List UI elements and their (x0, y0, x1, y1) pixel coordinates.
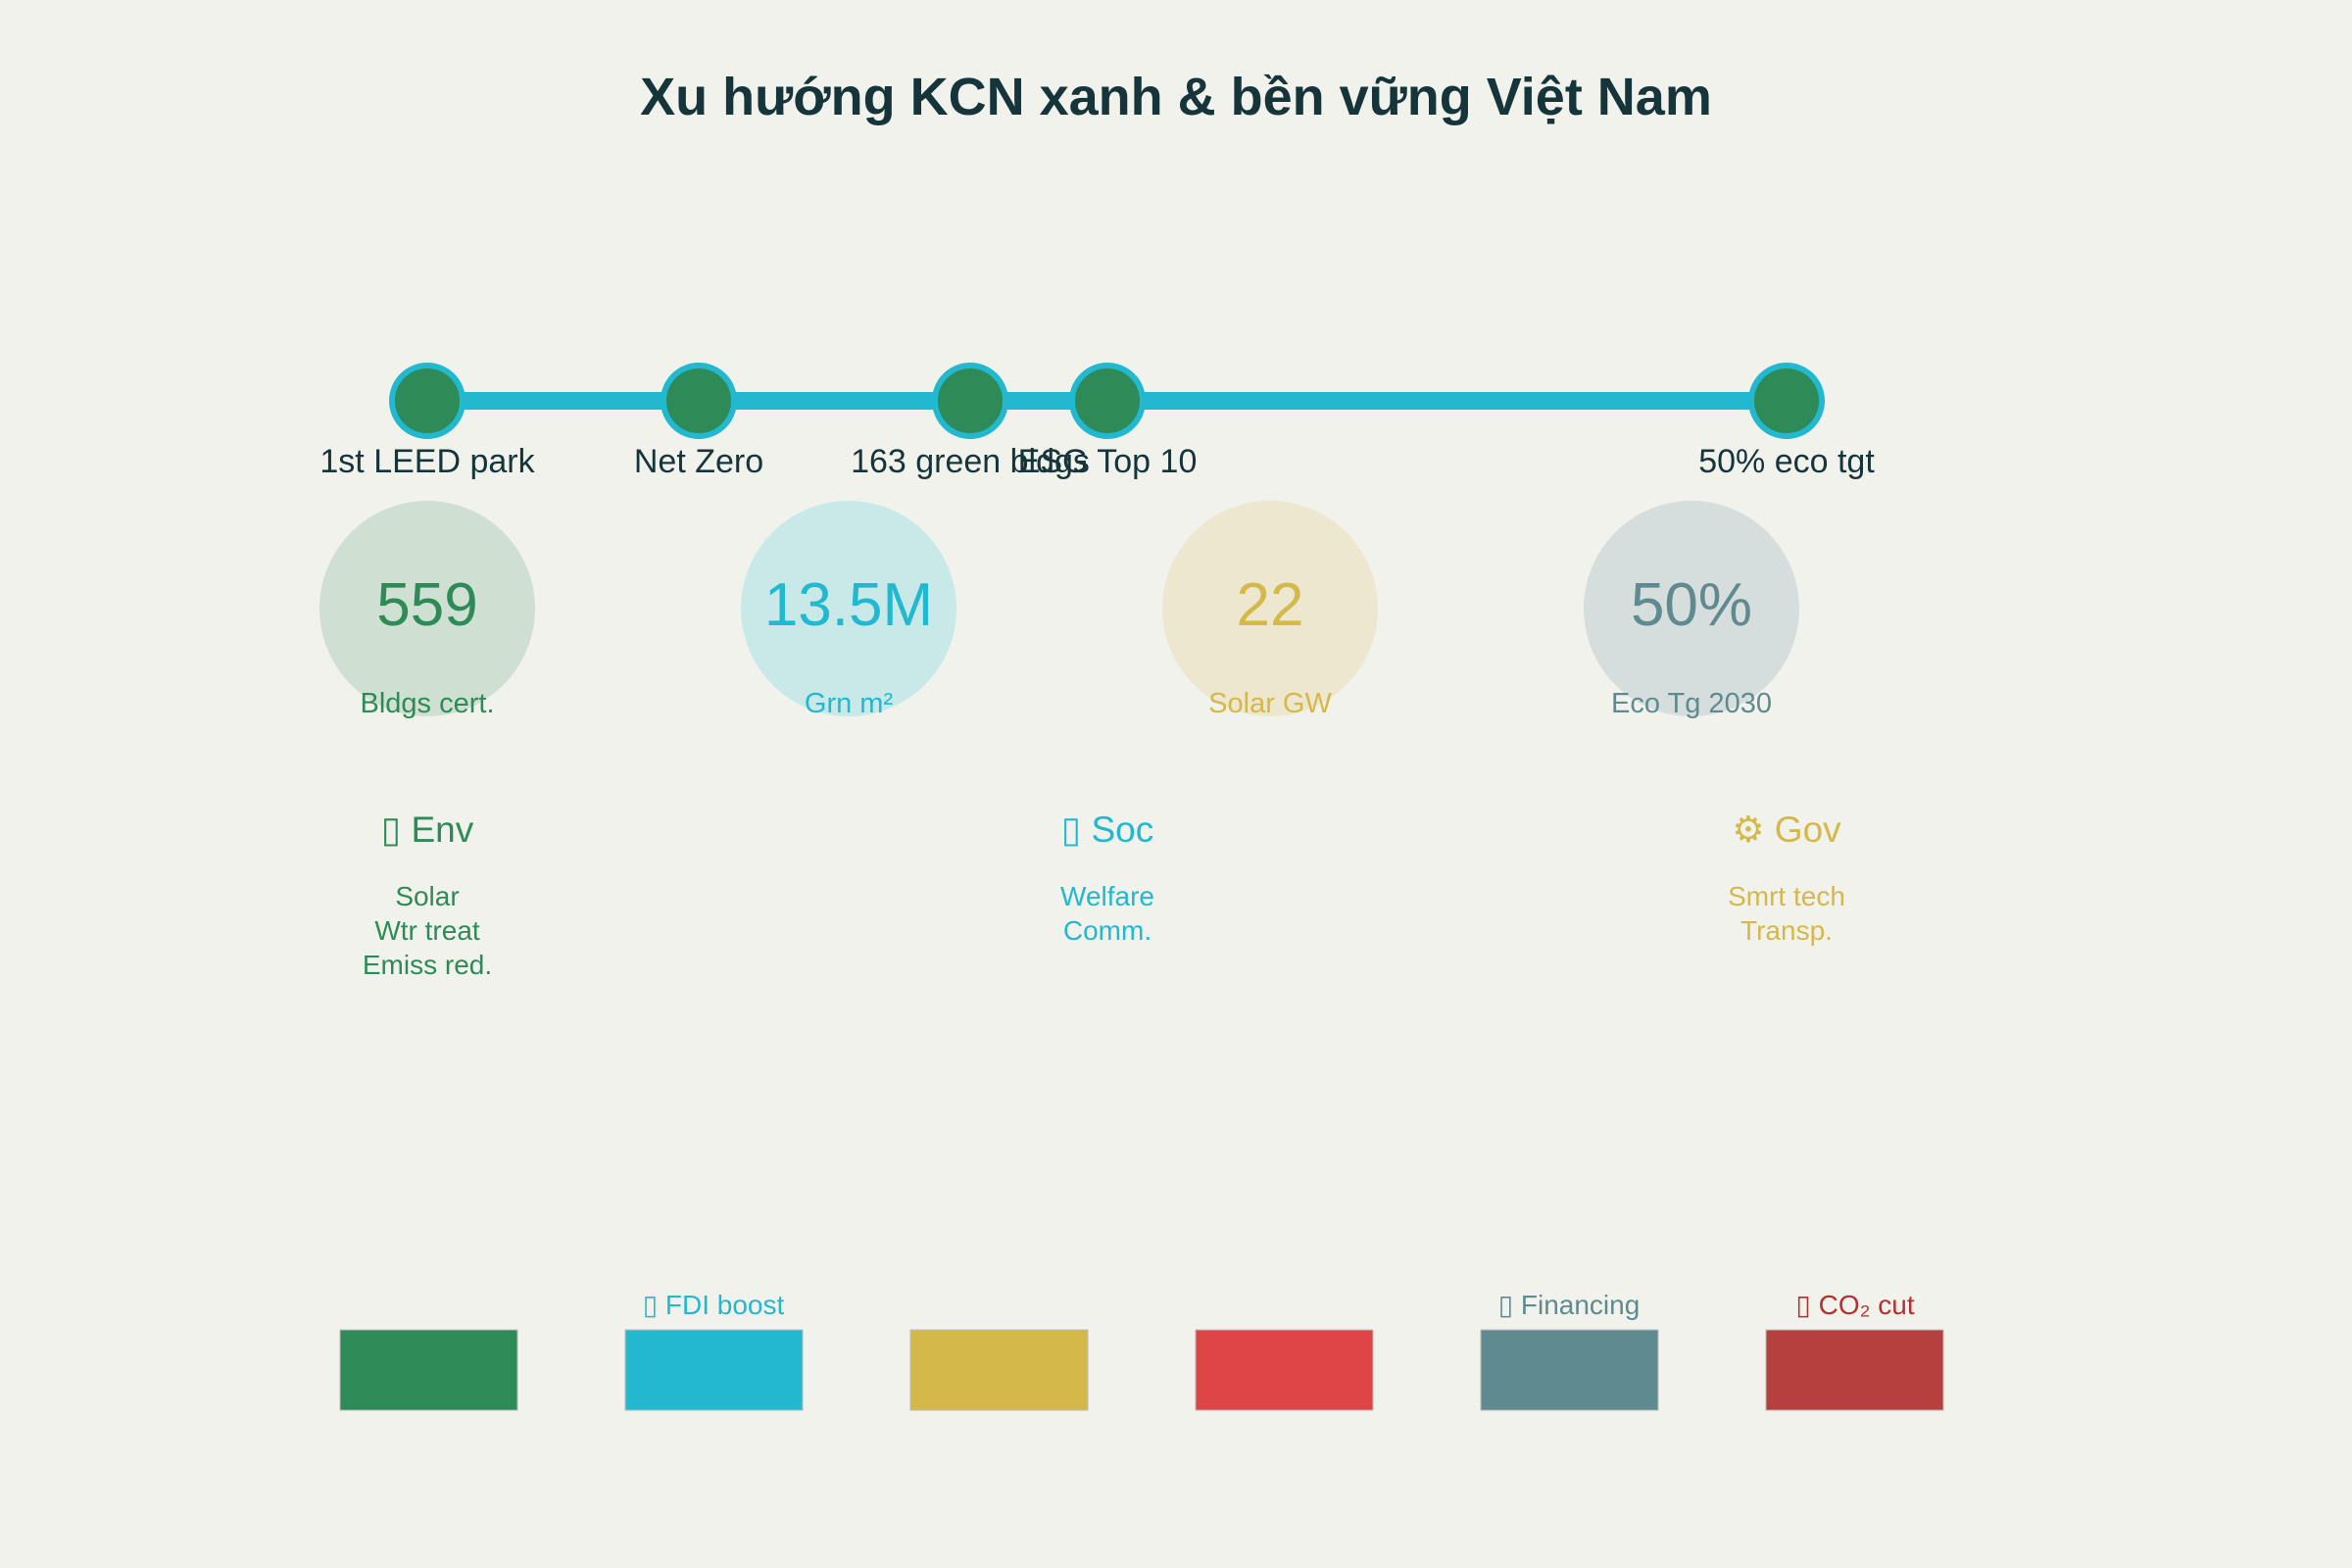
category: Env (363, 809, 492, 980)
milestone: 163 green bldgs (851, 366, 1090, 480)
bottom color bars: ▯ FDI boost (643, 1290, 784, 1320)
stat: 50%: 50% (1631, 571, 1752, 639)
category: Soc: Welfare (1060, 881, 1154, 911)
category: Soc: Comm. (1063, 915, 1152, 946)
milestone: 50% eco tgt (1698, 366, 1875, 480)
stat: 50%: Eco Tg 2030 (1611, 688, 1772, 719)
stat: 50% (1584, 501, 1799, 719)
stat: 559: 559 (376, 571, 478, 639)
category: Soc: ▯ Soc (1061, 809, 1153, 850)
bottom color bars (340, 1290, 1943, 1410)
milestone: ESG Top 10 (1018, 366, 1197, 480)
stat: 22: 22 (1237, 571, 1303, 639)
stat: 559 (319, 501, 535, 719)
title: Xu hướng KCN xanh & bền vững Việt Nam (640, 68, 1712, 126)
stat: 22 (1162, 501, 1378, 719)
category: Env: ▯ Env (381, 809, 474, 850)
stat: 22: Solar GW (1208, 688, 1332, 719)
milestone: Net Zero (634, 366, 763, 480)
milestone: 50% eco tgt: 50% eco tgt (1698, 443, 1875, 480)
milestone: ESG Top 10: ESG Top 10 (1018, 443, 1197, 480)
timeline (319, 366, 1875, 480)
bottom color bars: ▯ Financing (1498, 1290, 1640, 1320)
category: Gov: ⚙ Gov (1732, 809, 1841, 850)
category: Gov: Transp. (1740, 915, 1833, 946)
bottom color bars: ▯ CO₂ cut (1795, 1290, 1915, 1320)
category: Soc (1060, 809, 1154, 946)
category: Gov (1728, 809, 1845, 946)
milestone: 1st LEED park: 1st LEED park (319, 443, 536, 480)
category: Env: Wtr treat (374, 915, 480, 946)
milestone: Net Zero: Net Zero (634, 443, 763, 480)
milestone: 163 green bldgs: 163 green bldgs (851, 443, 1090, 480)
stat: 13.5M: Grn m² (805, 688, 893, 719)
category: Gov: Smrt tech (1728, 881, 1845, 911)
stat: 559: Bldgs cert. (361, 688, 494, 719)
milestone: 1st LEED park (319, 366, 536, 480)
stat: 13.5M: 13.5M (764, 571, 933, 639)
stat: 13.5M (741, 501, 956, 719)
category: Env: Emiss red. (363, 950, 492, 980)
category: Env: Solar (395, 881, 460, 911)
